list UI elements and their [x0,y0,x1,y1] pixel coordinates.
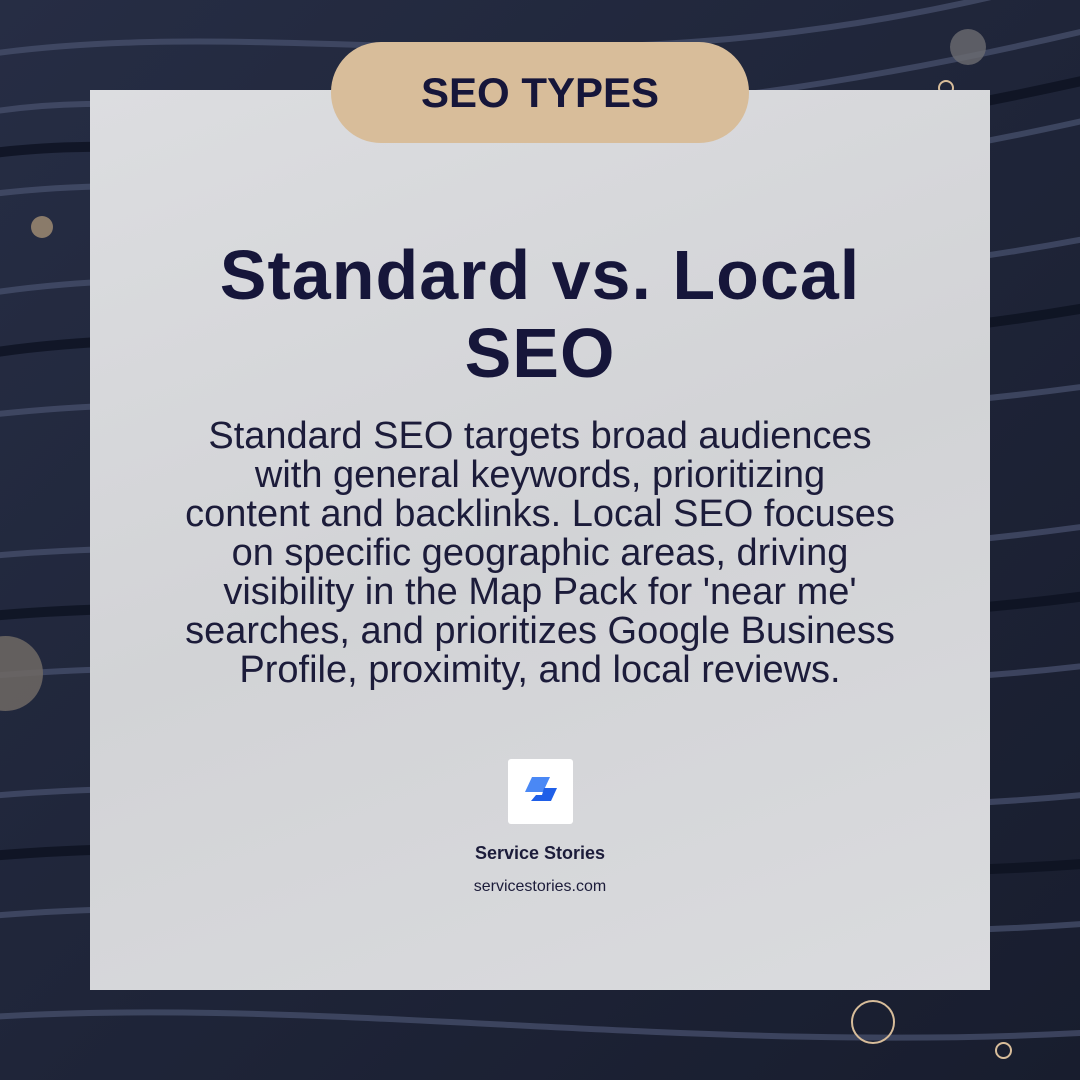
body text: visibility in the Map Pack for 'near me' [223,571,857,613]
brand name: Service Stories [475,843,605,863]
heading pill: SEO TYPES [331,42,749,143]
body text: searches, and prioritizes Google Business [185,610,895,652]
title: SEO [465,314,615,392]
heading pill: SEO TYPES: SEO TYPES [421,69,659,116]
icon: logo [508,759,573,824]
decorative circles [950,29,986,65]
body text: Standard SEO targets broad audiences [208,415,872,457]
body text: on specific geographic areas, driving [232,532,848,574]
body text: content and backlinks. Local SEO focuses [185,493,895,535]
brand url: servicestories.com [474,878,606,895]
panel: main card [90,90,990,990]
title [220,236,860,392]
title: Standard vs. Local [220,236,860,314]
body text [185,415,895,691]
body text: Profile, proximity, and local reviews. [239,649,841,691]
body text: with general keywords, prioritizing [255,454,825,496]
